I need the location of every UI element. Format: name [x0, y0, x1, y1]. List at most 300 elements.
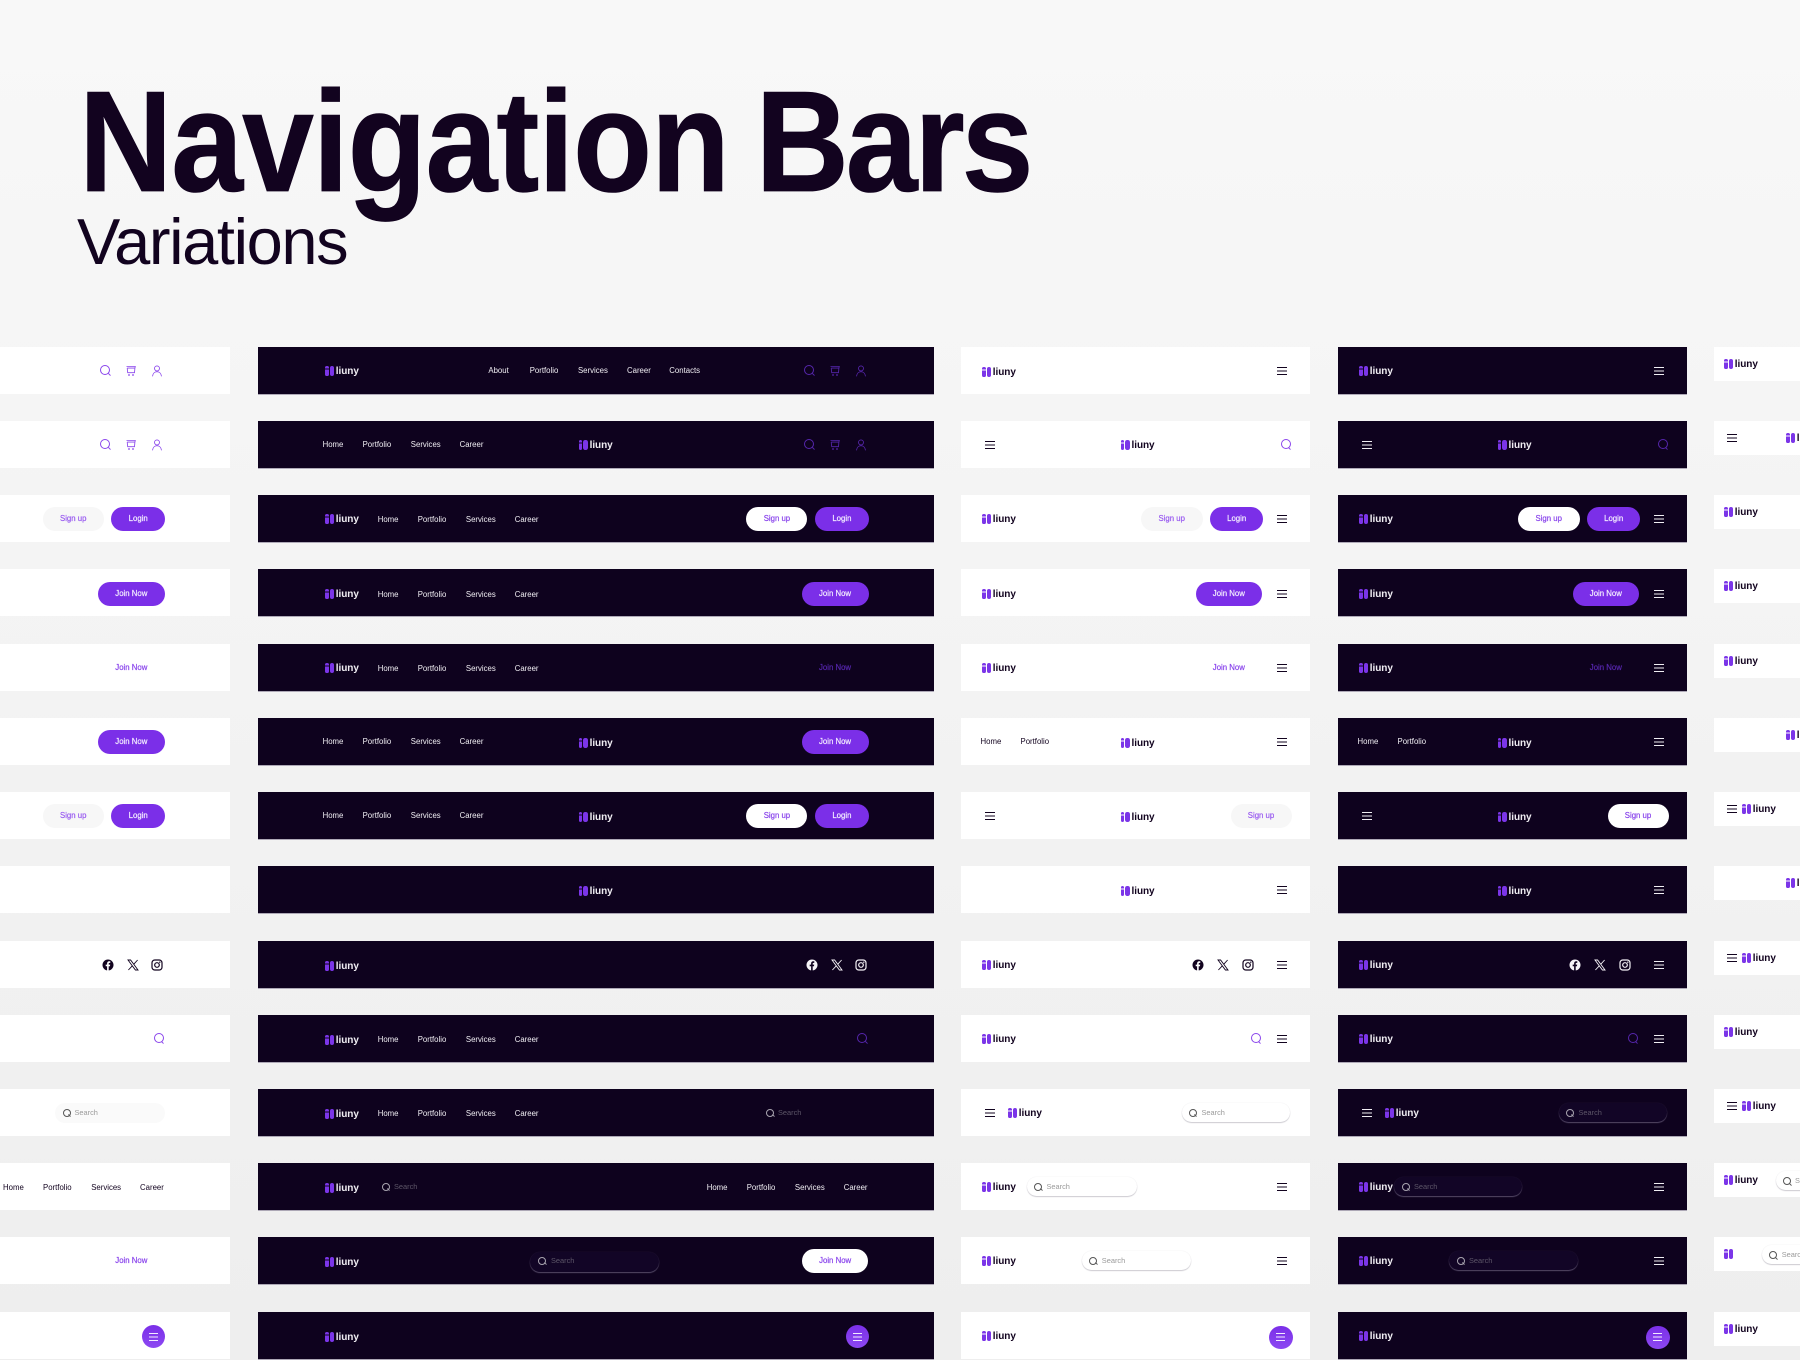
link: join now: Join Now [115, 1256, 147, 1265]
logo: liuny [993, 1182, 1016, 1193]
icon: menu [1654, 1034, 1664, 1042]
panel: light bar 14, column 1 [0, 1312, 230, 1359]
logo: liuny [993, 589, 1016, 600]
nav links: Contacts [669, 366, 700, 374]
panel: light bar 11, column 1 [0, 1089, 230, 1136]
logo [325, 1182, 358, 1194]
icon: search [804, 365, 814, 375]
icon: user [856, 366, 866, 376]
nav links [323, 810, 493, 820]
panel: light bar 8, column 5 [1714, 866, 1800, 900]
logo: liuny [1735, 1174, 1758, 1186]
logo [579, 886, 612, 897]
nav links: Portfolio [418, 1034, 446, 1044]
nav links [378, 514, 539, 524]
icon: x [1594, 959, 1606, 971]
icon: search [1628, 1033, 1638, 1043]
logo: liuny [590, 812, 613, 823]
panel: light bar 2, column 3 [961, 421, 1310, 468]
logo: liuny [1753, 1100, 1776, 1112]
logo: liuny [1508, 440, 1532, 451]
panel: light bar 4, column 5 [1714, 569, 1800, 603]
icon: cart [126, 440, 136, 450]
icon: search [857, 1033, 867, 1043]
panel: dark bar 5, column 4 [1338, 644, 1687, 691]
link: join now: Join Now [1213, 663, 1245, 672]
icon: instagram [1242, 959, 1254, 971]
icon: search [1783, 1177, 1791, 1185]
button: sign up [746, 507, 807, 531]
nav links: Services [91, 1182, 121, 1192]
button: login: Login [129, 811, 148, 820]
button: sign up: Sign up [1248, 811, 1274, 820]
panel: light bar 10, column 3 [961, 1015, 1310, 1062]
panel: dark bar 13, logo search join [258, 1237, 934, 1284]
logo [1724, 358, 1758, 370]
icon: search [1251, 1033, 1261, 1043]
icon: menu [1727, 434, 1737, 442]
logo: liuny [1735, 1026, 1758, 1038]
nav links: Portfolio [418, 664, 446, 672]
logo: liuny [993, 960, 1016, 970]
panel: light bar 4, column 1 [0, 569, 230, 616]
button: sign up: Sign up [1158, 514, 1185, 523]
button: sign up [1230, 804, 1292, 828]
panel: dark bar 1, column 4 [1338, 347, 1687, 394]
logo [1724, 1026, 1757, 1038]
icon: menu [1654, 738, 1664, 746]
nav links: Home [707, 1182, 728, 1192]
panel: light bar 5, column 3 [961, 644, 1310, 691]
panel: light bar 12, column 1 [0, 1163, 230, 1210]
panel: dark bar 11, logo nav search [258, 1089, 934, 1136]
logo [1359, 1034, 1392, 1045]
panel: dark bar 7, column 4 [1338, 792, 1687, 839]
search field [1559, 1102, 1667, 1122]
search field [530, 1252, 659, 1272]
button: login: Login [129, 514, 148, 523]
logo [1121, 738, 1155, 749]
nav links: Portfolio [747, 1182, 775, 1192]
icon: menu [1654, 366, 1664, 374]
icon: instagram [855, 959, 867, 971]
button: sign up [1518, 507, 1580, 531]
icon: x [831, 959, 843, 971]
nav links: About [488, 366, 509, 374]
icon: menu [1362, 440, 1372, 448]
logo: liuny [1370, 1182, 1393, 1193]
nav links: Services [466, 1108, 496, 1118]
nav links [980, 736, 1049, 746]
panel: dark bar 2, nav centered logo icons [258, 421, 934, 468]
logo: liuny [993, 663, 1016, 674]
icon: search [63, 1108, 71, 1116]
logo [982, 1034, 1015, 1045]
icon: menu [1277, 366, 1287, 374]
nav links: Portfolio [363, 810, 391, 820]
panel: light bar 11, column 5 [1714, 1089, 1800, 1123]
icon: menu [1277, 664, 1287, 672]
button: sign up [746, 804, 807, 828]
logo: liuny [1735, 580, 1758, 592]
logo [1359, 514, 1393, 525]
icon: search [154, 1033, 164, 1043]
logo: liuny [1131, 738, 1155, 749]
panel: dark bar 12, logo search nav [258, 1163, 934, 1210]
panel: light bar 5, column 1 [0, 644, 230, 691]
nav links [3, 1182, 173, 1192]
panel: light bar 9, column 3 [961, 941, 1310, 988]
nav links: Services [411, 736, 441, 746]
logo [1498, 812, 1531, 823]
nav links: Portfolio [418, 590, 446, 598]
button: join now: Join Now [115, 589, 147, 598]
logo: liuny [336, 1256, 359, 1268]
panel: dark bar 9, column 4 [1338, 941, 1687, 988]
link: join now: Join Now [115, 663, 147, 672]
nav links: Career [515, 1034, 539, 1044]
nav links: Services [411, 440, 441, 448]
panel: dark bar 3, column 4 [1338, 495, 1687, 542]
logo [1121, 440, 1155, 451]
logo [1359, 663, 1393, 674]
logo [1742, 952, 1775, 964]
button: join now [98, 730, 165, 754]
icon: search [1089, 1256, 1097, 1264]
nav links: Career [140, 1182, 164, 1192]
panel: light bar 13, column 1 [0, 1237, 230, 1284]
link: join now: Join Now [1590, 663, 1622, 672]
panel: dark bar 11, column 4 [1338, 1089, 1687, 1136]
logo: liuny [1131, 812, 1155, 823]
button: sign up: Sign up [1535, 514, 1562, 523]
button: join now [1572, 582, 1639, 606]
icon: menu [1727, 1102, 1737, 1110]
logo: liuny [1508, 812, 1532, 823]
nav links [378, 1108, 548, 1118]
panel: light bar 3, column 1 [0, 495, 230, 542]
nav links: Portfolio [530, 366, 558, 374]
nav links: Home [378, 1108, 398, 1118]
search field [1182, 1102, 1290, 1122]
icon: menu [1277, 1182, 1287, 1190]
icon: facebook [1192, 959, 1204, 971]
logo [1786, 432, 1800, 444]
logo: liuny [1735, 506, 1758, 518]
button: login [1587, 507, 1640, 531]
logo: liuny [1370, 366, 1393, 377]
search placeholder: Search [551, 1256, 574, 1264]
logo: liuny [1019, 1108, 1042, 1119]
logo: liuny [336, 1034, 359, 1046]
panel: dark bar 10, column 4 [1338, 1015, 1687, 1062]
logo [982, 960, 1015, 970]
icon: menu [1277, 960, 1287, 968]
icon: cart [830, 366, 840, 376]
icon: search [100, 439, 110, 449]
icon: menu [1362, 1108, 1372, 1116]
search placeholder: Search [1469, 1256, 1492, 1264]
panel: light bar 9, column 5 [1714, 941, 1800, 975]
nav links [488, 366, 700, 374]
nav links [378, 1034, 548, 1044]
logo [1724, 1174, 1757, 1186]
logo: liuny [1131, 440, 1155, 451]
icon: menu [1654, 1256, 1664, 1264]
logo [1786, 730, 1800, 740]
nav links: Services [578, 366, 608, 374]
nav links: Career [515, 514, 539, 524]
logo [325, 589, 359, 600]
icon: facebook [102, 959, 114, 971]
logo [1359, 1256, 1392, 1267]
nav links: Portfolio [363, 440, 391, 448]
logo: liuny [336, 366, 359, 377]
button: login [1210, 507, 1263, 531]
icon: menu [1277, 886, 1287, 894]
icon: menu [985, 812, 995, 820]
logo: liuny [1370, 663, 1393, 674]
button: join now: Join Now [115, 737, 147, 746]
nav links: Home [323, 440, 343, 448]
nav links: Portfolio [43, 1182, 72, 1192]
logo: liuny [590, 440, 613, 451]
icon: search [538, 1256, 546, 1264]
nav links: Home [378, 664, 398, 672]
button: login: Login [832, 514, 851, 523]
button: join now [802, 1249, 868, 1273]
logo [1359, 589, 1393, 600]
logo: liuny [336, 1332, 359, 1342]
nav links: Home [378, 1034, 398, 1044]
logo [1724, 1324, 1757, 1334]
icon: search [1402, 1182, 1410, 1190]
logo [982, 366, 1016, 378]
nav links: Home [323, 810, 343, 820]
logo [1742, 1100, 1775, 1112]
search placeholder: Search [778, 1108, 801, 1116]
logo: liuny [993, 1034, 1016, 1045]
nav links: Services [466, 664, 496, 672]
button: sign up [43, 507, 104, 531]
title: Navigation Bars [79, 62, 1030, 222]
logo: liuny [1753, 804, 1776, 814]
nav links: Services [466, 514, 496, 524]
panel: light bar 9, column 1 [0, 941, 230, 988]
icon: menu [1654, 664, 1664, 672]
logo [325, 1332, 358, 1342]
logo [579, 440, 613, 451]
search field [1027, 1176, 1136, 1196]
button: login: Login [1604, 514, 1623, 523]
icon: menu [1654, 590, 1664, 598]
button: join now: Join Now [819, 1256, 851, 1265]
search placeholder: Search [1202, 1108, 1225, 1116]
logo: liuny [1370, 514, 1393, 525]
nav links: Career [627, 366, 651, 374]
nav links: Services [466, 590, 496, 598]
round menu button [1646, 1326, 1670, 1349]
button: join now [802, 730, 869, 754]
logo [325, 1108, 358, 1120]
icon: menu [1277, 1256, 1287, 1264]
logo [579, 738, 613, 749]
button: join now: Join Now [819, 737, 851, 746]
icon: menu [985, 440, 995, 448]
logo [1359, 1330, 1392, 1342]
logo: liuny [1131, 886, 1155, 897]
logo [1742, 804, 1775, 814]
logo [1008, 1108, 1041, 1119]
button: join now [98, 582, 165, 606]
panel: dark bar 1, logo nav icons [258, 347, 934, 394]
panel: light bar 6, column 1 [0, 718, 230, 765]
panel: dark bar 2, column 4 [1338, 421, 1687, 468]
nav links: Portfolio [418, 1108, 446, 1118]
logo [982, 1182, 1015, 1193]
logo [325, 366, 359, 377]
panel: dark bar 4, column 4 [1338, 569, 1687, 616]
icon: menu [1362, 812, 1372, 820]
panel: light bar 10, column 1 [0, 1015, 230, 1062]
logo [982, 1256, 1015, 1267]
panel: light bar 8, column 3 [961, 866, 1310, 913]
logo [1498, 738, 1532, 749]
logo: liuny [1735, 1324, 1758, 1334]
logo: liuny [1370, 589, 1393, 600]
nav links: Services [795, 1182, 825, 1192]
button: login: Login [832, 811, 851, 820]
icon: search [1658, 439, 1668, 449]
logo [1121, 812, 1154, 823]
search field [1449, 1250, 1578, 1270]
icon: facebook [1569, 959, 1581, 971]
button: join now [802, 582, 869, 606]
button: login: Login [1227, 514, 1246, 523]
button: join now [1196, 582, 1262, 606]
nav links: Career [460, 810, 483, 820]
logo [1359, 366, 1393, 377]
logo: liuny [336, 960, 359, 972]
panel: light bar 2, column 1 [0, 421, 230, 468]
logo: liuny [1508, 886, 1532, 897]
search field [1776, 1171, 1800, 1190]
panel: light bar 13, column 5 [1714, 1237, 1800, 1271]
icon: search [1034, 1182, 1042, 1190]
panel: light bar 1, column 3 [961, 347, 1310, 394]
panel: dark bar 3, logo nav two buttons [258, 495, 934, 542]
logo: liuny [1735, 358, 1758, 370]
icon: x [127, 959, 139, 971]
icon: menu [1654, 1182, 1664, 1190]
icon: cart [126, 366, 136, 376]
logo [1498, 886, 1531, 897]
button: sign up [1141, 507, 1203, 531]
button: login [111, 507, 165, 531]
subtitle: Variations [77, 205, 347, 278]
icon: search [1769, 1251, 1777, 1259]
search field [54, 1103, 165, 1123]
icon: menu [1727, 954, 1737, 962]
panel: dark bar 14, column 4 [1338, 1312, 1687, 1359]
icon: menu [1727, 805, 1737, 813]
logo mark [1724, 1248, 1734, 1260]
round menu button [846, 1325, 869, 1348]
search placeholder: Search [1102, 1256, 1125, 1264]
panel: dark bar 6, column 4 [1338, 718, 1687, 765]
panel: dark bar 12, column 4 [1338, 1163, 1687, 1210]
logo: liuny [1735, 656, 1758, 666]
icon: menu [1654, 886, 1664, 894]
panel: light bar 14, column 5 [1714, 1312, 1800, 1346]
logo: liuny [1753, 952, 1776, 964]
panel: dark bar 4, logo nav join [258, 569, 934, 616]
button: sign up: Sign up [764, 811, 790, 820]
logo: liuny [1508, 738, 1532, 749]
panel: light bar 1, column 5 [1714, 347, 1800, 381]
logo: liuny [590, 886, 613, 897]
panel: light bar 7, column 1 [0, 792, 230, 839]
panel: dark bar 7, nav centered logo two buttons [258, 792, 934, 839]
icon: search [804, 439, 814, 449]
nav links: Portfolio [418, 514, 446, 524]
icon: search [1189, 1108, 1197, 1116]
icon: menu [1277, 514, 1287, 522]
panel: dark bar 6, nav centered logo join [258, 718, 934, 765]
panel: light bar 14, column 3 [961, 1312, 1310, 1359]
logo [1724, 506, 1758, 518]
logo: liuny [1370, 1034, 1393, 1045]
nav links: Career [844, 1182, 868, 1192]
nav links [707, 1182, 877, 1192]
round menu button [1269, 1326, 1293, 1349]
icon: search [1457, 1256, 1465, 1264]
logo [1359, 1182, 1392, 1193]
logo [325, 1256, 358, 1268]
icon: search [766, 1108, 774, 1116]
icon: cart [830, 440, 840, 450]
logo [1724, 656, 1758, 666]
search placeholder: Search [394, 1182, 417, 1190]
logo: liuny [993, 1330, 1016, 1342]
nav links: Home [378, 514, 398, 524]
panel: light bar 10, column 5 [1714, 1015, 1800, 1049]
search field [1762, 1245, 1800, 1264]
icon: search [1280, 439, 1290, 449]
panel: light bar 7, column 5 [1714, 792, 1800, 826]
icon: instagram [1619, 959, 1631, 971]
logo: liuny [1370, 1256, 1393, 1267]
button: sign up: Sign up [1625, 811, 1651, 820]
button: login [815, 507, 869, 531]
panel: dark bar 5, logo nav join link [258, 644, 934, 691]
icon: instagram [151, 959, 163, 971]
button: sign up [1608, 804, 1668, 828]
logo: liuny [336, 663, 359, 674]
logo: liuny [1396, 1108, 1419, 1119]
logo [982, 514, 1016, 525]
icon: menu [1654, 514, 1664, 522]
nav links: Career [460, 440, 483, 448]
panel: dark bar 8, column 4 [1338, 866, 1687, 913]
panel: light bar 1, column 1 [0, 347, 230, 394]
logo [1724, 580, 1758, 592]
panel: dark bar 10, logo nav search icon [258, 1015, 934, 1062]
logo [982, 663, 1016, 674]
logo [325, 514, 359, 525]
logo [1786, 878, 1800, 888]
search placeholder: Search [74, 1108, 98, 1116]
